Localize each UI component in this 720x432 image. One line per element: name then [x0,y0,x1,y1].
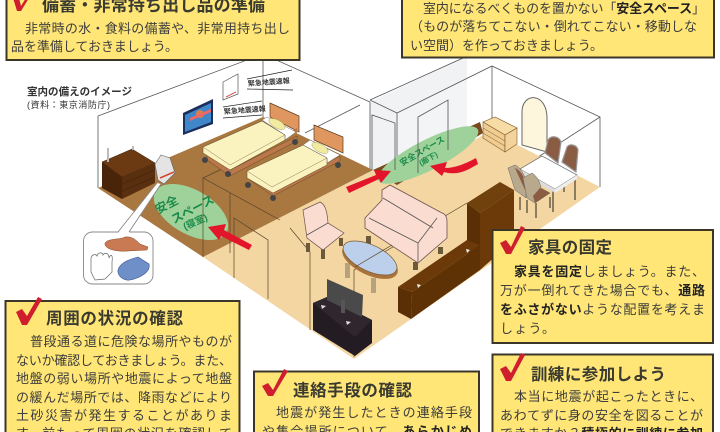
check mark [16,297,42,325]
heading: 周囲の状況の確認 [46,309,184,328]
body text: （ものが落ちてこない・倒れてこない・移動しな [410,19,697,34]
safety space bedroom: スペース [169,192,217,227]
callout: disaster goods [84,183,161,284]
safety space hallway [371,116,485,194]
panel: join drills [492,353,713,432]
check mark [500,226,525,254]
TV and stand [313,279,372,356]
icon: slippers [105,237,148,251]
body text: 本当に地震が起こったときに、 [514,389,703,404]
check mark [262,369,288,396]
safety space hallway: (廊下) [417,149,440,168]
alert labels [223,70,293,118]
low brown cabinet [398,240,480,319]
emergency backpack [155,155,175,184]
wall TV [183,99,213,135]
oval table [337,234,403,293]
back walls [98,54,600,188]
bed 2 [245,125,343,201]
body text [500,389,703,432]
panel: fix furniture [492,226,713,343]
body text [11,21,290,54]
icon: gloves [91,253,112,280]
safety space bedroom [144,172,238,252]
check mark [500,353,525,381]
alert labels: 緊急地震速報 [224,104,266,116]
safety space bedroom: 安全 [152,192,181,217]
body text: をふさがないような配置を考えま [500,302,705,317]
floor: brown hallway strip [373,122,483,185]
body text [16,334,232,432]
body text [500,264,705,336]
body text: 品を準備しておきましょう。 [11,39,178,54]
alert labels: 緊急地震速報 [248,76,290,88]
safety space hallway: 安全スペース [398,134,446,168]
body text: 万が一倒れてきた場合でも、通路 [500,283,705,298]
floor: tan [203,131,600,359]
icon: blue shoes [118,257,149,280]
tall brown cabinet [467,182,514,270]
body text: 家具を固定しましょう。また、 [514,264,705,279]
floor plan illustration [98,54,600,359]
check mark [13,0,29,11]
body text: ないか確認しておきましょう。また、 [16,353,232,368]
heading: 連絡手段の確認 [293,380,412,400]
pink chair [303,202,344,259]
body text: しょう。 [500,321,555,336]
bed 1 [202,103,299,177]
arched door [522,98,547,152]
body text: 地盤の弱い場所や地震によって地盤 [16,371,232,386]
curved arrow [430,158,478,176]
pink sofa [365,185,447,270]
panel: stockpile [6,0,300,60]
panel: surroundings check [6,297,240,432]
arrow to bedroom safety space [208,224,252,250]
body text: い空間）を作っておきましょう。 [410,38,603,53]
dining set [508,137,578,218]
chest of drawers left [102,146,155,199]
body text: 普段通る道に危険な場所やものが [30,334,232,349]
body text: 室内になるべくものを置かない「安全スペース」 [423,1,705,16]
panel: safe space [402,0,714,58]
image caption [27,85,132,110]
heading: 家具の固定 [528,237,612,257]
front transparent wall lines [203,100,467,357]
body text [262,405,472,432]
dresser [483,117,517,152]
image caption: (資料：東京消防庁) [27,99,110,110]
heading: 訓練に参加しよう [531,365,666,384]
floor: brown bedroom [98,117,373,257]
body text: あわてずに身の安全を図ることが [500,408,703,423]
body text [410,1,705,53]
body text: 地震が発生したときの連絡手段 [276,405,472,420]
wall intercom [223,74,238,100]
body text: 非常時の水・食料の備蓄や、非常用持ち出し [25,21,290,36]
arrow to hallway [346,170,391,193]
safety space bedroom: (寝室) [181,211,209,233]
image caption: 室内の備えのイメージ [27,85,132,98]
body text: の緩んだ場所では、降雨などにより [16,390,232,405]
panel: contact method [254,369,479,432]
body text: 土砂災害が発生することがありま [16,408,232,423]
